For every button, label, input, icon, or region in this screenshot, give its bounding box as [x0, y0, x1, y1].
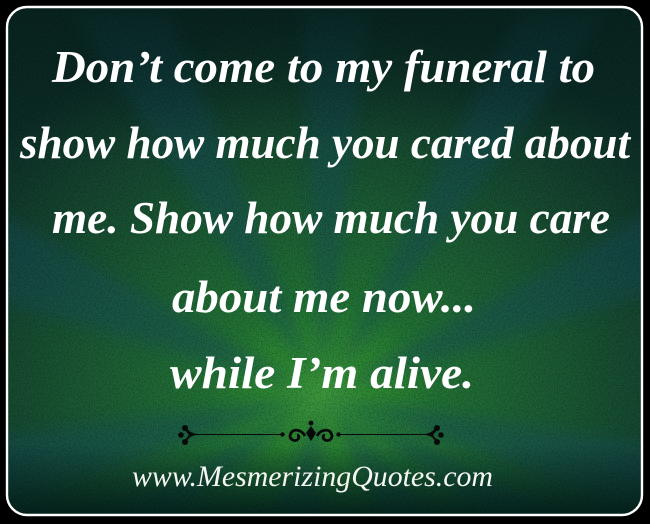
- quote text: show how much you cared about: [19, 118, 631, 168]
- left flourish: [178, 425, 200, 445]
- ornamental divider: [178, 421, 444, 445]
- center flourish: [280, 421, 341, 441]
- quote text: while I’m alive.: [170, 348, 474, 398]
- right flourish: [422, 425, 444, 445]
- website url: www.MesmerizingQuotes.com: [132, 460, 493, 493]
- quote text: Don’t come to my funeral to: [51, 42, 595, 92]
- quote text: [19, 42, 631, 398]
- quote text: me. Show how much you care: [52, 193, 610, 243]
- quote text: about me now...: [172, 272, 476, 322]
